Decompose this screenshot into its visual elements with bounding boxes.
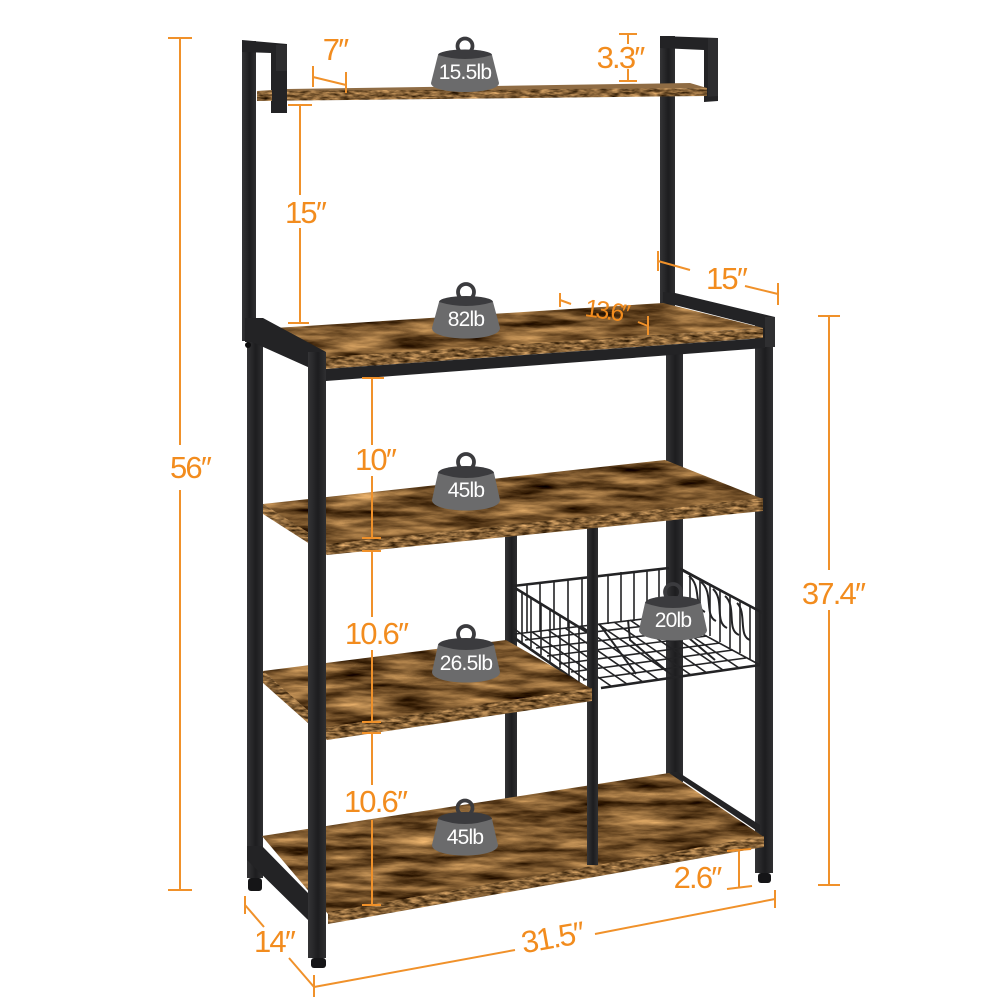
dimension: shelf gap 10.6 in lower [344, 733, 408, 905]
bottom shelf [262, 772, 764, 924]
weight: 45lb middle shelf [432, 454, 500, 510]
dimension: working height 37.4 in [802, 316, 866, 885]
top shelf [257, 71, 718, 113]
dimension: shelf gap 10 in: 10″ [355, 442, 397, 477]
dimension: overall height 56 in: 56″ [170, 450, 212, 485]
dimension: overall height 56 in [168, 38, 212, 890]
dimension: total width 31.5 in: 31.5″ [518, 915, 588, 960]
weight: 20lb basket: 20lb [655, 609, 691, 632]
weight: 15.5lb top shelf [431, 38, 499, 92]
dimension: total depth 14 in [245, 896, 314, 997]
main counter shelf [245, 292, 775, 381]
dimension: hutch height 15 in: 15″ [285, 195, 327, 230]
dimension: working height 37.4 in: 37.4″ [802, 576, 866, 611]
middle rear upright [505, 535, 517, 802]
dimension: total width 31.5 in [314, 890, 775, 987]
weight: 45lb bottom shelf [432, 800, 498, 856]
dimension: total depth 14 in: 14″ [254, 924, 296, 959]
dimension: top shelf depth 7 in [313, 32, 349, 93]
weight: 20lb basket [639, 584, 707, 640]
dimension: foot clearance 2.6 in [674, 849, 752, 895]
dimension: shelf gap 10.6 in lower: 10.6″ [344, 784, 408, 819]
middle front upright [587, 525, 598, 865]
lower-left short shelf [263, 640, 592, 740]
weight: 45lb middle shelf: 45lb [448, 479, 484, 502]
dimension: foot clearance 2.6 in: 2.6″ [674, 860, 722, 895]
dimension: hutch height 15 in [285, 105, 327, 323]
dimension: hutch width depth 15 in: 15″ [706, 261, 748, 296]
weight: 82lb counter [432, 284, 500, 338]
dimension: hutch width depth 15 in [658, 251, 778, 305]
front left upright and side rail [247, 352, 326, 968]
dimension: shelf gap 10.6 in upper: 10.6″ [345, 616, 409, 651]
dimension: counter depth 13.6 in: 13.6″ [583, 294, 632, 328]
front right upright [755, 317, 773, 883]
wire basket [513, 568, 763, 688]
weight: 82lb counter: 82lb [448, 308, 484, 331]
back right upright with top hook [660, 36, 718, 306]
shelving unit [242, 36, 775, 968]
dimension: shelf gap 10 in [355, 378, 397, 538]
weight: 45lb bottom shelf: 45lb [447, 826, 483, 849]
dimension: hook height 3.3 in: 3.3″ [597, 40, 645, 75]
weight: 26.5lb short shelf [432, 626, 500, 682]
dimension: shelf gap 10.6 in upper [345, 551, 409, 722]
weight: 15.5lb top shelf: 15.5lb [439, 61, 491, 84]
back left upright with top hook [242, 40, 287, 341]
dimension: top shelf depth 7 in: 7″ [323, 32, 349, 67]
back lower uprights [247, 340, 683, 891]
hanging hooks [689, 576, 750, 640]
weight: 26.5lb short shelf: 26.5lb [440, 652, 492, 675]
middle shelf [263, 460, 763, 555]
dimension: counter depth 13.6 in [560, 293, 648, 335]
